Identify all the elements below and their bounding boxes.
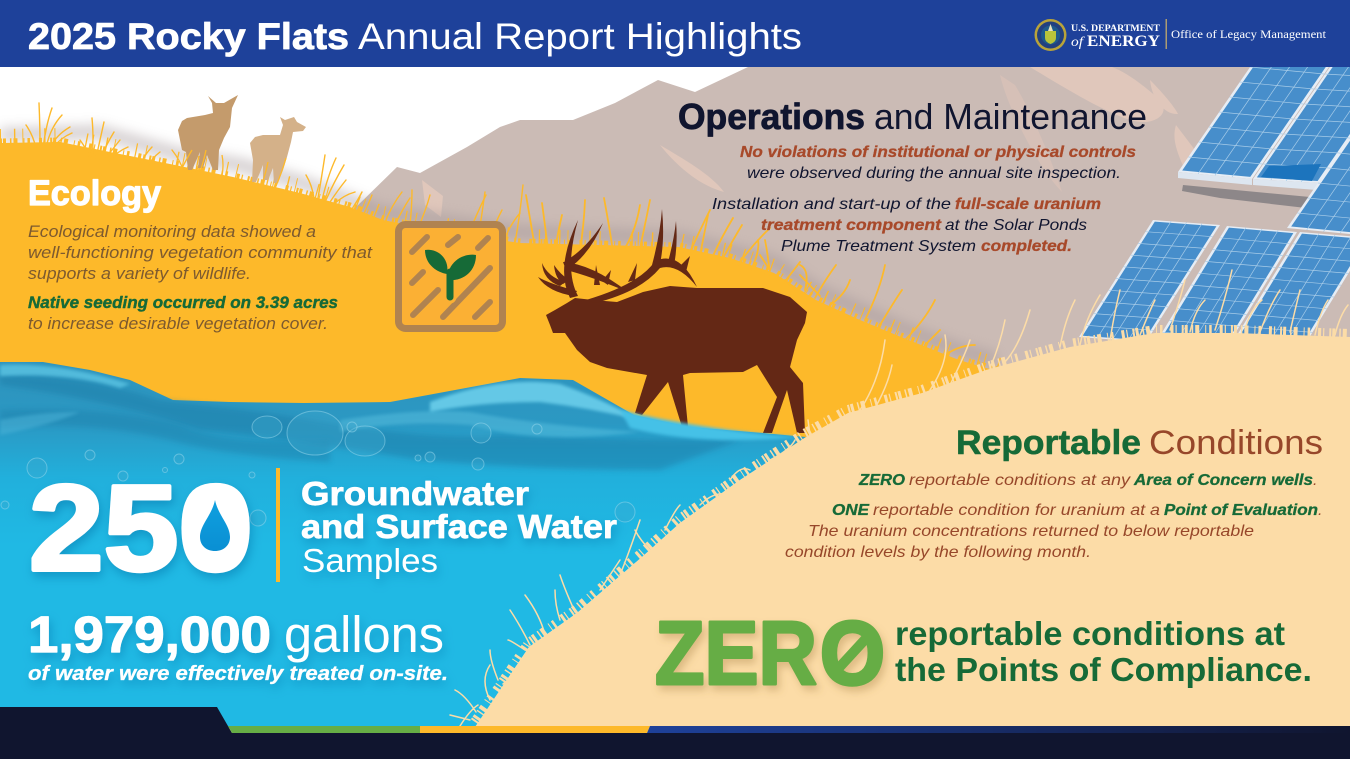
hill shadow xyxy=(0,132,996,360)
panel: water statistics xyxy=(28,460,617,685)
heading: reportable conditions: Reportable xyxy=(956,424,1141,462)
reportable conditions text: ONE xyxy=(832,502,870,519)
reportable conditions text: . xyxy=(1313,472,1317,489)
DOE wordmark xyxy=(1071,24,1327,50)
stat: gallons treated: of water were effectively treated on-site. xyxy=(28,663,448,685)
operations body text: full-scale uranium xyxy=(955,196,1101,213)
operations body text: treatment component xyxy=(761,217,942,234)
solar panels xyxy=(1079,22,1350,356)
stat: gallons treated: gallons xyxy=(284,606,444,663)
reportable conditions text xyxy=(785,472,1322,561)
reportable conditions text: The uranium concentrations returned to below reportable xyxy=(808,523,1254,540)
DOE wordmark: U.S. DEPARTMENT xyxy=(1071,24,1161,34)
operations body text: at the Solar Ponds xyxy=(945,217,1087,234)
zero statement: reportable conditions at xyxy=(895,615,1285,652)
icon: seeded plot with sprout xyxy=(398,224,502,328)
ecology body text: well-functioning vegetation community that xyxy=(28,244,374,262)
DOE wordmark: ENERGY xyxy=(1087,33,1160,50)
reportable conditions text: reportable condition for uranium at a xyxy=(873,502,1160,519)
icon: DOE seal xyxy=(1034,19,1066,51)
stat: gallons treated: 1,979,000 xyxy=(28,606,271,663)
operations body text: Installation and start-up of the xyxy=(712,196,951,213)
heading: operations and maintenance: Operations xyxy=(678,96,865,137)
panel: water xyxy=(0,362,806,728)
elk antlers xyxy=(538,209,697,303)
title: 2025 Rocky Flats xyxy=(28,16,349,57)
ecology body text xyxy=(28,223,374,333)
illustration: bull elk xyxy=(538,209,807,433)
reportable conditions text: condition levels by the following month. xyxy=(785,544,1091,561)
reportable conditions text: Area of Concern wells xyxy=(1133,472,1313,489)
heading: reportable conditions: Conditions xyxy=(1149,424,1323,462)
panel: ecology xyxy=(28,174,502,333)
yellow grass hill xyxy=(0,103,1000,460)
operations body text: No violations of institutional or physical controls xyxy=(740,144,1136,161)
elk doe right xyxy=(250,117,306,183)
samples label: and Surface Water xyxy=(301,508,617,545)
callout: zero points of compliance xyxy=(655,604,1312,704)
panel: operations and maintenance xyxy=(678,96,1147,255)
water bubbles xyxy=(1,411,635,526)
ecology body text: supports a variety of wildlife. xyxy=(28,265,251,283)
stat divider xyxy=(276,468,280,582)
samples label xyxy=(301,475,617,579)
zero statement: the Points of Compliance. xyxy=(895,651,1312,688)
mountain backdrop xyxy=(340,67,1350,440)
zero statement xyxy=(895,615,1312,688)
ecology body text: to increase desirable vegetation cover. xyxy=(28,315,328,333)
reportable conditions text: ZERO xyxy=(858,472,906,489)
water wave shading xyxy=(0,365,800,470)
elk does on the ridge xyxy=(178,95,306,186)
stat: gallons treated xyxy=(28,606,448,685)
header bar xyxy=(0,0,1350,67)
operations body text xyxy=(712,144,1136,255)
elk doe left xyxy=(178,95,238,170)
heading: operations and maintenance: and Maintenance xyxy=(874,96,1147,137)
title: Annual Report Highlights xyxy=(358,16,802,57)
grass: cream blades xyxy=(450,270,1350,726)
heading: reportable conditions xyxy=(956,424,1323,462)
heading: ecology: Ecology xyxy=(28,174,162,213)
zero wordmark: ZER xyxy=(655,604,817,704)
DOE wordmark: Office of Legacy Management xyxy=(1171,29,1327,41)
operations body text: completed. xyxy=(981,238,1072,255)
ecology body text: Ecological monitoring data showed a xyxy=(28,223,316,241)
operations body text: Plume Treatment System xyxy=(781,238,976,255)
heading: operations and maintenance xyxy=(678,96,1147,137)
panel: cream foreground xyxy=(450,270,1350,727)
samples label: Groundwater xyxy=(301,475,529,512)
icon: water drop xyxy=(200,500,230,551)
reportable conditions text: Point of Evaluation xyxy=(1164,502,1318,519)
operations body text: were observed during the annual site inspection. xyxy=(747,165,1121,182)
DOE wordmark: of xyxy=(1071,35,1085,50)
reportable conditions text: reportable conditions at any xyxy=(909,472,1131,489)
title xyxy=(28,16,802,57)
footer band xyxy=(0,707,1350,759)
reportable conditions text: . xyxy=(1318,502,1322,519)
zero wordmark: O xyxy=(820,604,885,704)
stat: 250 samples: 250 xyxy=(29,460,253,596)
samples label: Samples xyxy=(302,542,438,579)
ecology body text: Native seeding occurred on 3.39 acres xyxy=(28,294,338,312)
